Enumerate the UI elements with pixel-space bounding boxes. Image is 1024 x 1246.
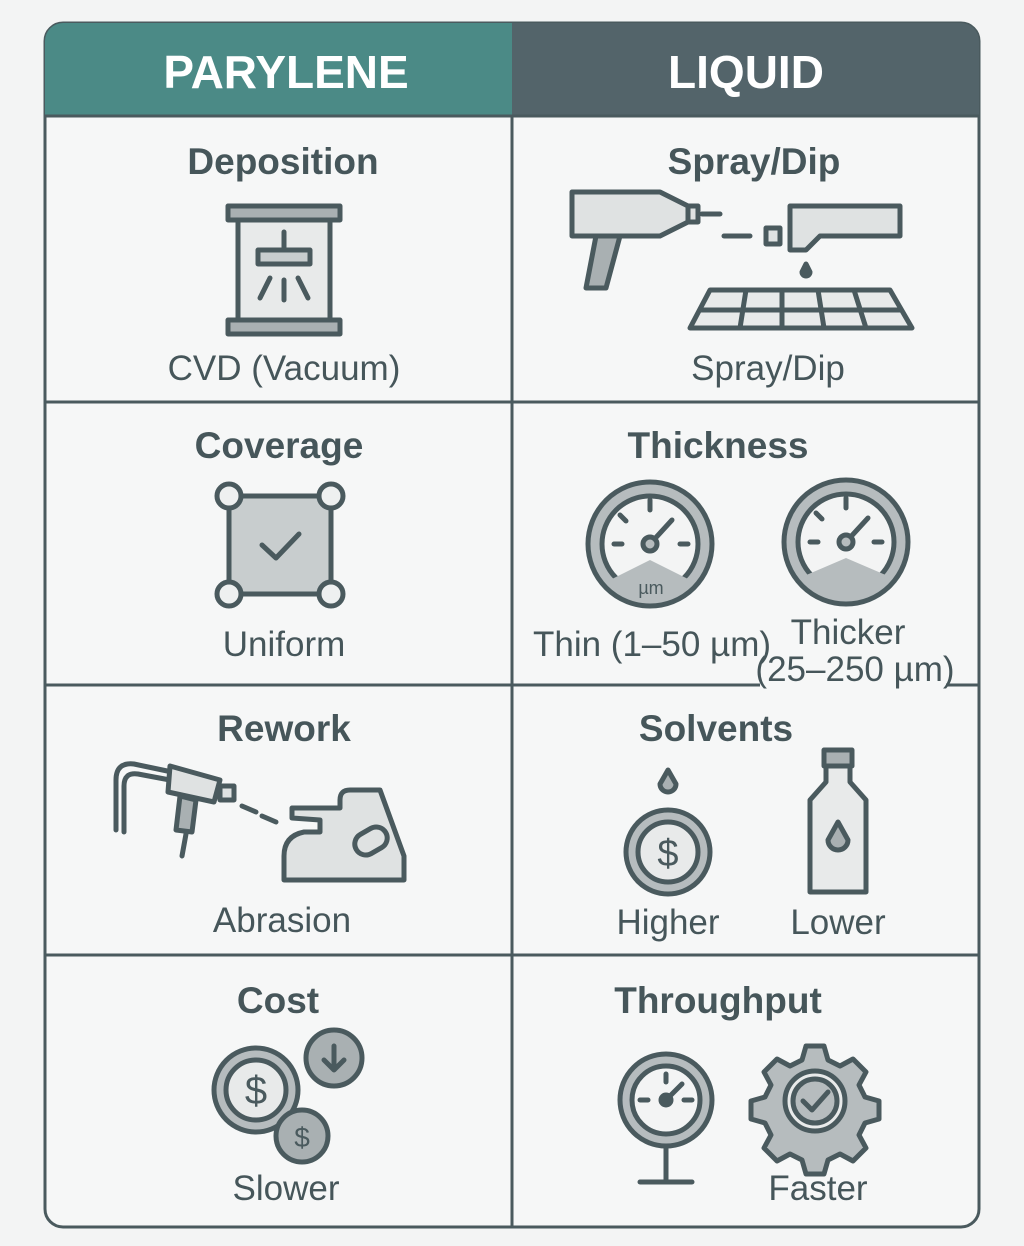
panel: throughput: Throughput: [614, 980, 822, 1021]
panel: spray/dip: Spray/Dip: [691, 349, 845, 388]
panel: thickness: (25–250 µm): [755, 650, 955, 689]
panel: coverage: [195, 425, 363, 664]
panel: spray/dip: [572, 141, 912, 388]
panel: thickness: Thicker: [791, 613, 906, 652]
panel: deposition: [168, 141, 400, 388]
panel: solvents: Higher: [616, 903, 720, 942]
icon: coins: [214, 1030, 362, 1162]
panel: rework: [116, 708, 404, 940]
icon: coin with drop: $: [657, 833, 679, 875]
icon: gear with check: [751, 1046, 879, 1174]
icon: gauge on stand: [620, 1054, 712, 1182]
header: parylene: [45, 23, 512, 116]
panel: cost: [214, 980, 362, 1208]
panel: solvents: Solvents: [639, 708, 793, 749]
icon: CVD chamber: [228, 206, 340, 334]
icon: coin with drop: [626, 770, 710, 894]
header: parylene: PARYLENE: [163, 46, 409, 98]
icon: bottle: [810, 750, 866, 892]
panel: solvents: Lower: [790, 903, 886, 942]
icon: coins: $: [245, 1069, 267, 1113]
panel: throughput: [614, 980, 879, 1208]
icon: uniform box with check: [217, 484, 343, 606]
header: liquid: [512, 23, 979, 116]
header: liquid: LIQUID: [668, 46, 824, 98]
icon: spray guns and grid: [572, 192, 912, 328]
panel: cost: Slower: [233, 1169, 340, 1208]
panel: throughput: Faster: [768, 1169, 868, 1208]
icon: gauge thin: [588, 482, 712, 606]
panel: rework: Abrasion: [213, 901, 351, 940]
panel: spray/dip: Spray/Dip: [668, 141, 840, 182]
panel: deposition: CVD (Vacuum): [168, 349, 400, 388]
icon: abrasion tool: [116, 764, 404, 880]
icon: coins: $: [294, 1122, 310, 1153]
panel: thickness: Thin (1–50 µm): [533, 625, 771, 664]
panel: coverage: Coverage: [195, 425, 363, 466]
panel: coverage: Uniform: [223, 625, 345, 664]
panel: rework: Rework: [217, 708, 351, 749]
icon: gauge thin: µm: [638, 578, 664, 598]
panel: deposition: Deposition: [187, 141, 379, 182]
panel: cost: Cost: [237, 980, 319, 1021]
panel: thickness: Thickness: [628, 425, 808, 466]
icon: gauge thick: [784, 480, 908, 604]
panel: thickness: [533, 425, 955, 689]
panel: solvents: [616, 708, 886, 942]
